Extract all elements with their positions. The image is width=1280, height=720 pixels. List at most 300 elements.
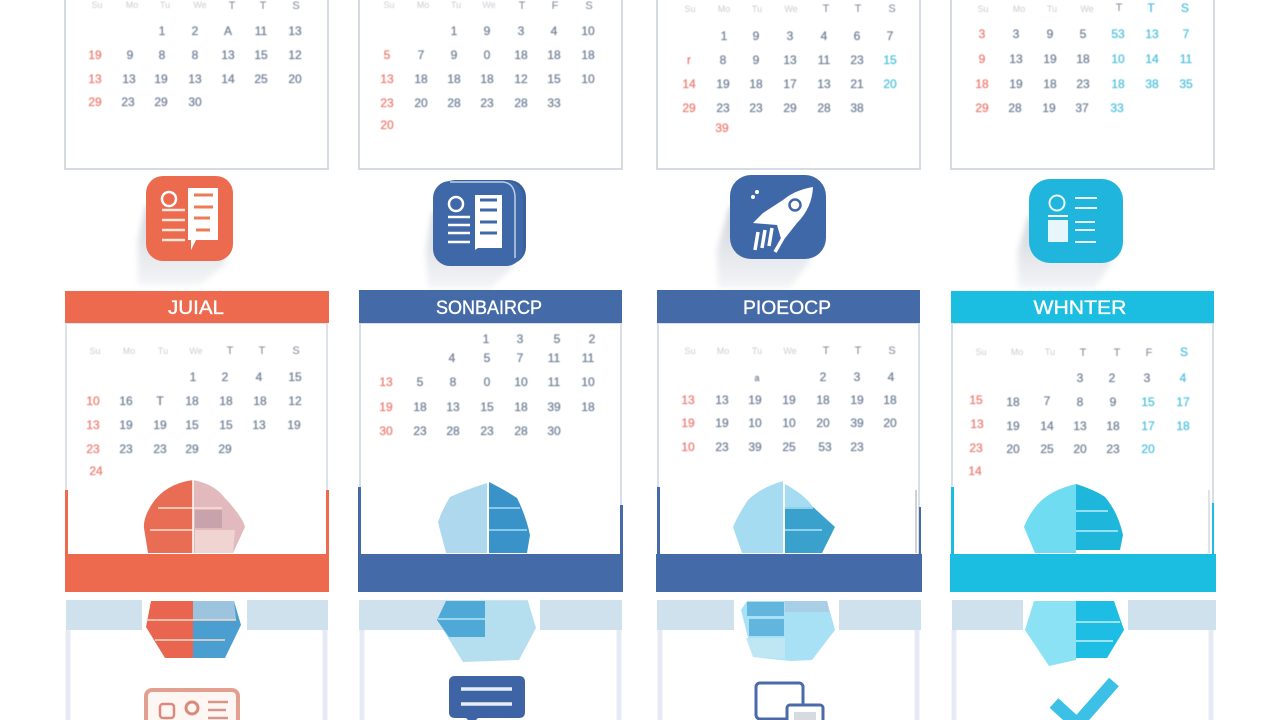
dates: top calendar 1: 13 xyxy=(221,48,235,62)
dates: top calendar 3: 21 xyxy=(850,77,864,91)
icon: coral document xyxy=(138,176,233,285)
dates: JUIAL: We xyxy=(189,346,203,356)
dates: SONBAIRCP: 0 xyxy=(484,375,491,389)
icon: cyan document xyxy=(1018,179,1123,288)
dates: WHNTER xyxy=(968,345,1190,478)
dates: SONBAIRCP: 23 xyxy=(413,424,427,438)
dates: top calendar 1: 8 xyxy=(192,48,199,62)
dates: top calendar 3: Tu xyxy=(752,4,762,14)
dates: SONBAIRCP: 28 xyxy=(514,424,528,438)
dates: SONBAIRCP: 19 xyxy=(379,400,393,414)
dates: top calendar 1: T xyxy=(229,0,236,12)
dates: top calendar 4: 19 xyxy=(1042,101,1056,115)
icon: check mark xyxy=(1054,682,1114,720)
dates: top calendar 1: 29 xyxy=(154,95,168,109)
panel: bottom calendar 1 xyxy=(66,600,328,720)
dates: top calendar 3: 11 xyxy=(818,53,831,67)
dates: top calendar 4: 18 xyxy=(1111,77,1125,91)
dates: top calendar 2: 1 xyxy=(451,24,458,38)
dates: top calendar 3: 9 xyxy=(753,53,760,67)
dates: top calendar 4: 53 xyxy=(1111,27,1125,41)
dome icon: WHNTER xyxy=(1024,484,1123,553)
dates: top calendar 1: 1 xyxy=(159,24,166,38)
dates: SONBAIRCP: 11 xyxy=(582,351,595,365)
dates: WHNTER: 17 xyxy=(1141,419,1155,433)
dates: SONBAIRCP: 8 xyxy=(450,375,457,389)
dates: top calendar 3: 13 xyxy=(817,77,831,91)
panel: bottom calendar 3 xyxy=(657,600,921,720)
dates: JUIAL: S xyxy=(292,345,300,357)
dates: top calendar 3: r xyxy=(687,53,691,67)
dates: JUIAL: 19 xyxy=(287,418,301,432)
dates: top calendar 3: 23 xyxy=(749,101,763,115)
dates: PIOEOCP: 3 xyxy=(854,370,861,384)
dates: JUIAL: 23 xyxy=(153,442,167,456)
dates: SONBAIRCP: 39 xyxy=(547,400,561,414)
dates: top calendar 1 xyxy=(88,0,302,109)
dates: top calendar 3: 17 xyxy=(783,77,797,91)
dates: top calendar 4: 5 xyxy=(1080,27,1087,41)
dates: top calendar 3: 14 xyxy=(682,77,696,91)
dates: PIOEOCP: 23 xyxy=(715,440,729,454)
dates: top calendar 4: Mo xyxy=(1013,4,1025,14)
dates: top calendar 2: 23 xyxy=(480,96,494,110)
dates: JUIAL: 1 xyxy=(190,370,197,384)
dates: top calendar 3: T xyxy=(823,3,830,15)
dates: PIOEOCP: 10 xyxy=(782,416,796,430)
dates: SONBAIRCP: 13 xyxy=(379,375,393,389)
dates: top calendar 3: S xyxy=(888,3,896,15)
dates: WHNTER: 18 xyxy=(1176,419,1190,433)
dates: top calendar 2: We xyxy=(482,0,496,10)
header bar: PIOEOCP xyxy=(657,290,920,323)
dates: SONBAIRCP: 1 xyxy=(483,332,490,346)
dates: SONBAIRCP: 2 xyxy=(589,332,596,346)
dates: JUIAL: 13 xyxy=(252,418,266,432)
header bar: WHNTER: WHNTER xyxy=(1034,298,1126,319)
panel: top calendar 3 xyxy=(657,0,920,169)
dates: JUIAL: 4 xyxy=(256,370,263,384)
dates: top calendar 2: 12 xyxy=(514,72,528,86)
dates: SONBAIRCP: 18 xyxy=(514,400,528,414)
dates: top calendar 3 xyxy=(682,3,897,135)
dates: JUIAL: Tu xyxy=(158,346,168,356)
dates: top calendar 4: 9 xyxy=(979,52,986,66)
dates: SONBAIRCP: 7 xyxy=(517,351,524,365)
reflected dome: panel 1 xyxy=(146,601,241,658)
dates: JUIAL: 15 xyxy=(288,370,302,384)
dates: top calendar 4: We xyxy=(1080,4,1094,14)
header bar: PIOEOCP: PIOEOCP xyxy=(743,298,831,319)
dates: WHNTER: 3 xyxy=(1144,371,1151,385)
dates: top calendar 2: 4 xyxy=(551,24,558,38)
dates: PIOEOCP: 13 xyxy=(681,393,695,407)
dates: top calendar 4 xyxy=(975,1,1193,115)
dates: top calendar 1: 15 xyxy=(254,48,268,62)
dates: top calendar 2: 33 xyxy=(547,96,561,110)
dates: top calendar 3: 7 xyxy=(887,29,894,43)
dates: top calendar 3: 18 xyxy=(749,77,763,91)
dates: PIOEOCP: a xyxy=(754,373,760,383)
panel: JUIAL calendar xyxy=(65,291,329,592)
dates: top calendar 1: 25 xyxy=(254,72,268,86)
dates: top calendar 1: 2 xyxy=(192,24,199,38)
dates: top calendar 2: 18 xyxy=(547,48,561,62)
dates: top calendar 3: 29 xyxy=(783,101,797,115)
dates: top calendar 4: 29 xyxy=(975,101,989,115)
dates: top calendar 1: 11 xyxy=(255,24,268,38)
dates: WHNTER: 23 xyxy=(969,441,983,455)
dates: top calendar 2: 28 xyxy=(447,96,461,110)
dates: JUIAL: 18 xyxy=(185,394,199,408)
dates: top calendar 1: 13 xyxy=(122,72,136,86)
dates: top calendar 4: 19 xyxy=(1009,77,1023,91)
header bar: JUIAL xyxy=(65,291,329,323)
dates: top calendar 4: 19 xyxy=(1043,52,1057,66)
dates: JUIAL: Mo xyxy=(123,346,135,356)
dates: top calendar 4: 10 xyxy=(1111,52,1125,66)
dates: top calendar 2: Mo xyxy=(417,0,429,10)
footer bar: PIOEOCP xyxy=(656,554,922,592)
dates: top calendar 2: 9 xyxy=(484,24,491,38)
dates: PIOEOCP: 4 xyxy=(888,370,895,384)
dates: top calendar 3: T xyxy=(855,3,862,15)
dates: WHNTER: 14 xyxy=(968,464,982,478)
dates: top calendar 4: S xyxy=(1181,1,1189,15)
dates: WHNTER: 20 xyxy=(1141,442,1155,456)
dates: top calendar 1: T xyxy=(260,0,267,12)
dates: WHNTER: 20 xyxy=(1006,442,1020,456)
dates: top calendar 2: 0 xyxy=(484,48,491,62)
dates: PIOEOCP: 53 xyxy=(818,440,832,454)
dates: SONBAIRCP: 13 xyxy=(446,400,460,414)
dates: WHNTER: 19 xyxy=(1006,419,1020,433)
dates: SONBAIRCP: 10 xyxy=(581,375,595,389)
icon: speech bubble xyxy=(449,676,525,720)
icon: rocket xyxy=(717,175,826,288)
dates: top calendar 4: 23 xyxy=(1076,77,1090,91)
dates: JUIAL: 10 xyxy=(86,394,100,408)
dates: top calendar 3: 38 xyxy=(850,101,864,115)
dates: PIOEOCP: 19 xyxy=(681,416,695,430)
dates: WHNTER: 3 xyxy=(1077,371,1084,385)
panel: top calendar 1 xyxy=(65,0,328,169)
panel: bottom calendar 4 xyxy=(952,600,1216,720)
dates: top calendar 2: 9 xyxy=(451,48,458,62)
dates: top calendar 4: T xyxy=(1147,1,1155,15)
dates: top calendar 2: 18 xyxy=(414,72,428,86)
dome icon: SONBAIRCP xyxy=(438,482,530,553)
dates: top calendar 4: 3 xyxy=(1013,27,1020,41)
panel: top calendar 4 xyxy=(951,0,1214,169)
dates: JUIAL: 29 xyxy=(218,442,232,456)
dates: top calendar 2: 3 xyxy=(518,24,525,38)
dates: SONBAIRCP: 10 xyxy=(514,375,528,389)
dates: JUIAL: 13 xyxy=(86,418,100,432)
dates: WHNTER: 9 xyxy=(1110,395,1117,409)
dates: top calendar 3: 23 xyxy=(850,53,864,67)
dates: WHNTER: 23 xyxy=(1106,442,1120,456)
dates: PIOEOCP: T xyxy=(823,345,830,357)
dates: SONBAIRCP: 18 xyxy=(413,400,427,414)
dates: top calendar 4: 35 xyxy=(1179,77,1193,91)
dates: JUIAL: Su xyxy=(89,346,101,356)
dates: WHNTER: 8 xyxy=(1077,395,1084,409)
dates: WHNTER: Mo xyxy=(1011,347,1023,357)
dates: top calendar 2: 28 xyxy=(514,96,528,110)
dates: top calendar 2: 23 xyxy=(380,96,394,110)
dates: top calendar 4: T xyxy=(1116,2,1123,14)
dates: top calendar 4: 9 xyxy=(1047,27,1054,41)
dates: PIOEOCP: 39 xyxy=(748,440,762,454)
panel: top calendar 2 xyxy=(359,0,622,169)
dates: JUIAL: 18 xyxy=(253,394,267,408)
dates: PIOEOCP: We xyxy=(783,346,797,356)
dates: top calendar 3: 20 xyxy=(883,77,897,91)
dates: WHNTER: T xyxy=(1114,347,1121,359)
dates: WHNTER: Su xyxy=(975,347,987,357)
dates: PIOEOCP: S xyxy=(888,345,896,357)
dates: top calendar 2: Tu xyxy=(451,0,461,10)
dates: JUIAL: 19 xyxy=(119,418,133,432)
dates: JUIAL: T xyxy=(259,345,266,357)
dates: top calendar 3: We xyxy=(784,4,798,14)
dates: SONBAIRCP: 15 xyxy=(480,400,494,414)
dates: top calendar 1: Tu xyxy=(160,0,170,10)
dates: top calendar 2: S xyxy=(585,0,593,12)
dates: top calendar 4: 18 xyxy=(1043,77,1057,91)
dates: PIOEOCP: 18 xyxy=(883,393,897,407)
dates: top calendar 1: 14 xyxy=(221,72,235,86)
dates: PIOEOCP: 19 xyxy=(748,393,762,407)
dates: top calendar 2: 5 xyxy=(384,48,391,62)
dates: WHNTER: 20 xyxy=(1073,442,1087,456)
dates: PIOEOCP: Mo xyxy=(717,346,729,356)
dates: top calendar 1: 19 xyxy=(88,48,102,62)
dates: WHNTER: 13 xyxy=(970,417,984,431)
dates: top calendar 3: Mo xyxy=(718,4,730,14)
dates: WHNTER: S xyxy=(1180,345,1188,359)
dates: top calendar 1: 9 xyxy=(127,48,134,62)
dates: PIOEOCP: 23 xyxy=(850,440,864,454)
dates: JUIAL: 29 xyxy=(185,442,199,456)
dates: top calendar 3: 8 xyxy=(720,53,727,67)
dates: top calendar 1: 12 xyxy=(288,48,302,62)
dates: JUIAL: 15 xyxy=(185,418,199,432)
dates: PIOEOCP: 18 xyxy=(816,393,830,407)
dates: JUIAL: 15 xyxy=(219,418,233,432)
dates: PIOEOCP: 10 xyxy=(681,440,695,454)
dates: JUIAL: T xyxy=(227,345,234,357)
dates: top calendar 4: 33 xyxy=(1110,101,1124,115)
dates: WHNTER: 18 xyxy=(1006,395,1020,409)
dates: PIOEOCP: 20 xyxy=(816,416,830,430)
dates: PIOEOCP: 19 xyxy=(850,393,864,407)
dates: PIOEOCP: 2 xyxy=(820,370,827,384)
dates: WHNTER: 7 xyxy=(1044,394,1051,408)
panel: bottom calendar 2 xyxy=(359,600,622,720)
dates: WHNTER: 15 xyxy=(1141,395,1155,409)
reflected dome: panel 4 xyxy=(1025,601,1124,666)
header bar: WHNTER xyxy=(951,291,1214,323)
dates: top calendar 1: S xyxy=(292,0,300,12)
dates: JUIAL: T xyxy=(156,394,164,408)
dates: top calendar 3: 23 xyxy=(716,101,730,115)
dates: top calendar 4: 38 xyxy=(1145,77,1159,91)
reflected dome: panel 3 xyxy=(741,601,835,661)
dates: WHNTER: F xyxy=(1146,347,1153,359)
dates: top calendar 3: 1 xyxy=(721,29,728,43)
dates: top calendar 1: 19 xyxy=(154,72,168,86)
dates: PIOEOCP: Tu xyxy=(752,346,762,356)
dates: top calendar 1: We xyxy=(193,0,207,10)
dates: top calendar 3: 3 xyxy=(787,29,794,43)
dates: WHNTER: 18 xyxy=(1106,419,1120,433)
dates: JUIAL: 24 xyxy=(89,464,103,478)
dates: top calendar 1: 13 xyxy=(288,24,302,38)
dates: WHNTER: 25 xyxy=(1040,442,1054,456)
dates: top calendar 2: 18 xyxy=(514,48,528,62)
dates: top calendar 4: 3 xyxy=(979,27,986,41)
dates: top calendar 4: 11 xyxy=(1180,52,1193,66)
panel: SONBAIRCP calendar xyxy=(358,290,623,592)
reflected dome: panel 2 xyxy=(437,601,536,662)
dates: top calendar 4: Su xyxy=(977,4,989,14)
dates: top calendar 1: 29 xyxy=(88,95,102,109)
dates: JUIAL: 19 xyxy=(153,418,167,432)
footer bar: SONBAIRCP xyxy=(358,554,623,592)
dates: PIOEOCP: 10 xyxy=(748,416,762,430)
dates: PIOEOCP: 39 xyxy=(850,416,864,430)
dates: top calendar 3: 15 xyxy=(883,53,897,67)
dates: PIOEOCP xyxy=(681,345,897,454)
dates: SONBAIRCP: 28 xyxy=(446,424,460,438)
dates: JUIAL: 23 xyxy=(86,442,100,456)
dates: top calendar 4: 7 xyxy=(1183,27,1190,41)
header bar: JUIAL: JUIAL xyxy=(168,298,224,319)
dates: top calendar 2: F xyxy=(552,0,559,12)
dates: PIOEOCP: T xyxy=(855,345,862,357)
dates: top calendar 4: Tu xyxy=(1047,4,1057,14)
dates: SONBAIRCP: 5 xyxy=(484,351,491,365)
dates: top calendar 2: 18 xyxy=(447,72,461,86)
dates: PIOEOCP: 25 xyxy=(782,440,796,454)
dates: top calendar 1: 13 xyxy=(88,72,102,86)
dates: top calendar 4: 18 xyxy=(975,77,989,91)
dates: SONBAIRCP: 30 xyxy=(547,424,561,438)
header bar: SONBAIRCP: SONBAIRCP xyxy=(436,298,542,319)
dome icon: JUIAL xyxy=(144,480,245,553)
header bar: SONBAIRCP xyxy=(359,290,622,323)
dates: SONBAIRCP xyxy=(379,332,596,438)
dates: top calendar 3: 29 xyxy=(682,101,696,115)
dates: top calendar 3: 13 xyxy=(783,53,797,67)
dates: SONBAIRCP: 5 xyxy=(554,332,561,346)
icon: profile card xyxy=(146,690,238,720)
dates: SONBAIRCP: 11 xyxy=(548,375,561,389)
dates: top calendar 1: 13 xyxy=(188,72,202,86)
icon: blue document xyxy=(426,180,526,288)
dates: top calendar 2: 10 xyxy=(581,72,595,86)
dates: WHNTER: T xyxy=(1080,347,1087,359)
dates: top calendar 3: 19 xyxy=(716,77,730,91)
dates: PIOEOCP: 20 xyxy=(883,416,897,430)
dates: SONBAIRCP: 30 xyxy=(379,424,393,438)
dates: top calendar 2 xyxy=(380,0,595,132)
dates: top calendar 1: 20 xyxy=(288,72,302,86)
dates: top calendar 3: 6 xyxy=(854,29,861,43)
dates: top calendar 1: Mo xyxy=(126,0,138,10)
panel: WHNTER calendar xyxy=(950,291,1216,592)
dates: top calendar 4: 13 xyxy=(1145,27,1159,41)
dates: top calendar 2: 20 xyxy=(380,118,394,132)
dates: WHNTER: 2 xyxy=(1109,371,1116,385)
dates: PIOEOCP: 13 xyxy=(715,393,729,407)
dates: top calendar 2: Su xyxy=(383,0,395,10)
dates: top calendar 2: 18 xyxy=(581,48,595,62)
dates: top calendar 2: 18 xyxy=(480,72,494,86)
dates: top calendar 3: Su xyxy=(684,4,696,14)
dates: JUIAL: 12 xyxy=(288,394,302,408)
dates: JUIAL: 23 xyxy=(119,442,133,456)
dates: top calendar 2: 15 xyxy=(547,72,561,86)
dates: PIOEOCP: 19 xyxy=(715,416,729,430)
dome icon: PIOEOCP xyxy=(733,481,835,553)
dates: top calendar 4: 13 xyxy=(1009,52,1023,66)
dates: top calendar 4: 18 xyxy=(1076,52,1090,66)
dates: PIOEOCP: 19 xyxy=(782,393,796,407)
dates: WHNTER: Tu xyxy=(1045,347,1055,357)
dates: JUIAL xyxy=(86,345,302,478)
dates: top calendar 4: 37 xyxy=(1075,101,1089,115)
dates: top calendar 2: T xyxy=(519,0,526,12)
dates: top calendar 1: 8 xyxy=(159,48,166,62)
dates: SONBAIRCP: 3 xyxy=(517,332,524,346)
dates: top calendar 2: 20 xyxy=(414,96,428,110)
icon: monitors xyxy=(756,683,823,720)
dates: top calendar 1: A xyxy=(224,24,232,38)
dates: top calendar 1: Su xyxy=(91,0,103,10)
dates: SONBAIRCP: 18 xyxy=(581,400,595,414)
dates: top calendar 2: 10 xyxy=(581,24,595,38)
dates: top calendar 3: 9 xyxy=(753,29,760,43)
dates: SONBAIRCP: 4 xyxy=(449,351,456,365)
dates: top calendar 1: 23 xyxy=(121,95,135,109)
dates: top calendar 4: 28 xyxy=(1008,101,1022,115)
dates: WHNTER: 13 xyxy=(1073,419,1087,433)
dates: JUIAL: 18 xyxy=(219,394,233,408)
dates: top calendar 3: 4 xyxy=(821,29,828,43)
dates: SONBAIRCP: 5 xyxy=(417,375,424,389)
footer bar: JUIAL xyxy=(65,554,329,592)
dates: PIOEOCP: Su xyxy=(684,346,696,356)
dates: top calendar 3: 28 xyxy=(817,101,831,115)
dates: JUIAL: 16 xyxy=(119,394,133,408)
dates: top calendar 1: 30 xyxy=(188,95,202,109)
dates: SONBAIRCP: 11 xyxy=(548,351,561,365)
dates: WHNTER: 4 xyxy=(1180,371,1187,385)
dates: top calendar 4: 14 xyxy=(1145,52,1159,66)
dates: WHNTER: 14 xyxy=(1040,419,1054,433)
dates: top calendar 2: 7 xyxy=(418,48,425,62)
dates: top calendar 3: 39 xyxy=(715,121,729,135)
footer bar: WHNTER xyxy=(950,554,1216,592)
panel: PIOEOCP calendar xyxy=(656,290,922,592)
dates: top calendar 2: 13 xyxy=(380,72,394,86)
dates: JUIAL: 2 xyxy=(222,370,229,384)
dates: WHNTER: 15 xyxy=(969,393,983,407)
dates: WHNTER: 17 xyxy=(1176,395,1190,409)
